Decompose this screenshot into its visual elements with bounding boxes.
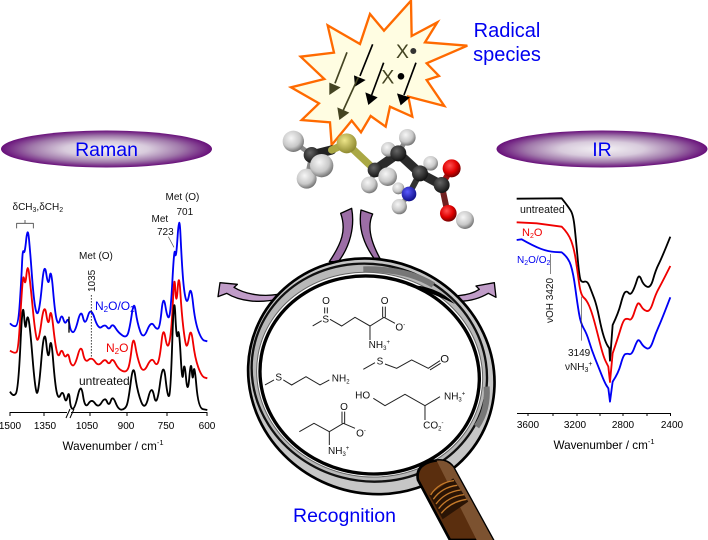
heading: Raman: Raman <box>75 139 138 161</box>
trace labels: O/O <box>528 255 547 266</box>
icon: magnifying glass: - <box>364 429 366 435</box>
heading: Recognition: Recognition <box>293 505 396 527</box>
handle <box>418 460 493 540</box>
peak annotations: δCH <box>12 202 33 213</box>
peak annotations: 2 <box>59 207 63 214</box>
peak annotations: νOH 3420 <box>545 278 556 323</box>
trace labels: 2 <box>115 347 120 356</box>
arrows <box>329 44 416 120</box>
icon: methionine molecule <box>283 129 474 229</box>
axis: IR wavenumber <box>517 413 671 416</box>
icon: magnifying glass: + <box>462 391 466 397</box>
peak annotations: 723 <box>157 227 174 238</box>
icon: magnifying glass: - <box>403 323 405 329</box>
icon: magnifying glass: NH <box>444 391 458 402</box>
peak annotations: ,δCH <box>36 202 59 213</box>
axis: Raman wavenumber <box>10 409 208 418</box>
radical labels: X <box>381 67 394 88</box>
icon: magnifying glass: NH <box>328 446 342 457</box>
peak annotations: 701 <box>176 207 194 218</box>
trace labels <box>79 299 135 388</box>
peak annotations: 3149 <box>568 348 591 359</box>
trace labels: untreated <box>79 374 130 388</box>
panel: Raman spectrum <box>0 130 216 453</box>
icon: magnifying glass: S <box>322 315 329 326</box>
axis labels: 750 <box>158 421 175 432</box>
axis labels: Wavenumber / cm <box>553 439 648 452</box>
trace labels: N <box>106 341 115 355</box>
icon: magnifying glass: + <box>346 446 350 452</box>
axis labels <box>517 420 684 452</box>
icon: magnifying glass: O <box>340 402 348 413</box>
chart: Raman traces <box>10 220 207 410</box>
peak annotations: 1035 <box>87 269 98 292</box>
heading: IR: IR <box>592 139 612 161</box>
axis labels: 2800 <box>612 420 635 431</box>
peak annotations: Met (O) <box>79 251 113 262</box>
panel: IR spectrum <box>496 130 708 452</box>
icon: magnifying glass: + <box>386 340 390 346</box>
peak annotations: Met (O) <box>166 192 199 203</box>
icon: magnifying glass <box>209 218 533 540</box>
trace labels: 2 <box>546 260 550 267</box>
trace labels: O <box>119 341 128 355</box>
arrows: purple flow arrows <box>218 208 496 301</box>
arrow: top right <box>360 210 380 258</box>
icon: magnifying glass: O <box>356 429 364 440</box>
peak annotations <box>545 278 592 374</box>
axis labels: -1 <box>648 437 655 446</box>
icon: magnifying glass: O <box>381 296 389 307</box>
arrow: top left <box>329 208 353 262</box>
icon: magnifying glass: O <box>395 323 403 334</box>
icon: magnifying glass: - <box>441 421 443 427</box>
fragment structures <box>265 307 441 445</box>
icon: magnifying glass: 3 <box>458 397 462 403</box>
heading: Radical species: species <box>473 44 541 66</box>
heading: IR <box>496 130 708 168</box>
peak annotations <box>12 192 199 292</box>
trace labels: 2 <box>530 233 534 240</box>
axis labels: 3600 <box>517 420 540 431</box>
trace labels: 2 <box>524 260 528 267</box>
icon: magnifying glass: O <box>322 296 330 307</box>
axis labels: 1350 <box>34 421 57 432</box>
trace labels: 2 <box>104 305 109 314</box>
peak annotations: + <box>588 361 592 368</box>
icon: magnifying glass: NH <box>369 340 383 351</box>
chart: IR traces <box>517 198 670 402</box>
axis labels: Wavenumber / cm <box>62 440 157 453</box>
axis labels: 600 <box>199 421 216 432</box>
trace labels: O/O <box>108 299 130 313</box>
icon: magnifying glass: O <box>440 353 449 365</box>
icon: magnifying glass: NH <box>332 373 346 384</box>
peak annotations: νNH <box>565 362 584 373</box>
axis labels: 3200 <box>564 420 587 431</box>
heading: Radical species <box>473 20 541 66</box>
panel: radical starburst <box>291 1 467 145</box>
trace labels: O <box>534 227 543 239</box>
trace labels: N <box>522 227 530 239</box>
peak annotations: 3 <box>584 367 588 374</box>
trace labels: untreated <box>520 204 565 216</box>
icon: magnifying glass: S <box>377 357 384 368</box>
axis labels: 1050 <box>76 421 99 432</box>
starburst shape <box>291 1 467 145</box>
peak annotations: 3 <box>33 207 37 214</box>
radical labels: X <box>396 42 409 63</box>
radical labels <box>381 42 409 88</box>
trace labels: 2 <box>130 305 135 314</box>
icon: magnifying glass: HO <box>355 390 370 401</box>
heading: Raman <box>1 130 212 168</box>
icon: magnifying glass: S <box>275 373 282 384</box>
axis labels: -1 <box>157 438 164 447</box>
axis labels: 900 <box>118 421 135 432</box>
icon: magnifying glass: 3 <box>342 452 346 458</box>
trace labels: N <box>95 299 104 313</box>
icon: magnifying glass: CO <box>423 421 438 432</box>
lens rim <box>209 218 533 534</box>
arrow: right <box>458 283 496 301</box>
icon: magnifying glass: 2 <box>438 427 442 433</box>
trace labels: N <box>517 255 524 266</box>
icon: magnifying glass: 2 <box>346 379 350 385</box>
axis labels <box>0 421 216 453</box>
heading: Radical species: Radical <box>474 20 540 42</box>
trace labels <box>517 204 565 267</box>
arrow: left <box>218 283 278 301</box>
peak annotations: Met <box>152 214 168 225</box>
axis labels: 2400 <box>661 420 684 431</box>
icon: magnifying glass: 3 <box>383 346 387 352</box>
